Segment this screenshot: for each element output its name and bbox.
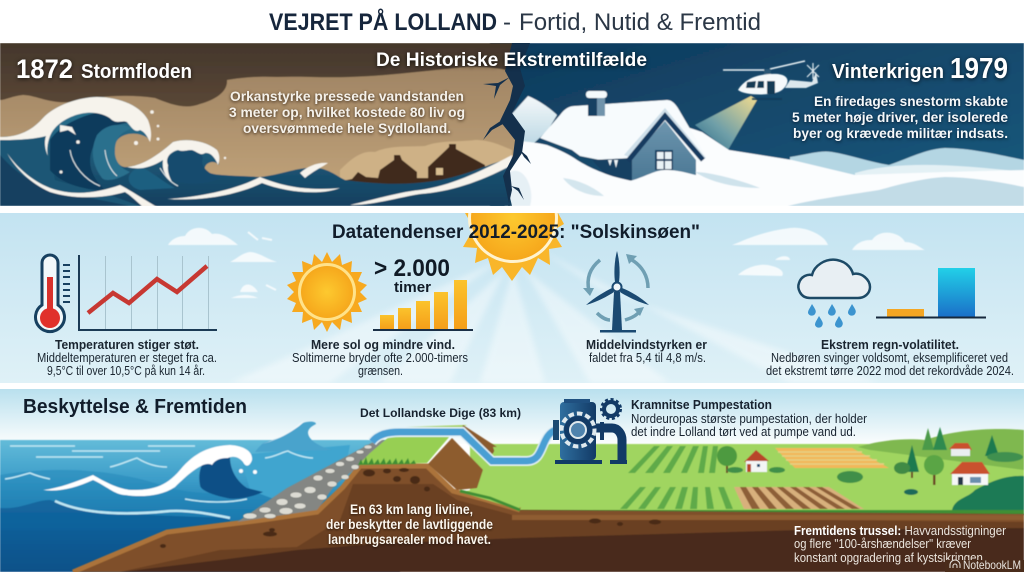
back snow drift: [600, 128, 1024, 206]
text: wind caption: Middelvindstyrken er: [586, 337, 707, 352]
front dike top: [358, 436, 450, 465]
text: winter war description: En firedages snestorm skabte: [814, 93, 1008, 109]
scene: dike cross-section: [73, 425, 1024, 572]
icon: helicopter spotlight: [695, 96, 757, 150]
text: storm flood description: oversvømmede hele Sydlolland.: [243, 120, 451, 136]
title: [269, 8, 761, 36]
item: sun hours: [287, 252, 473, 378]
title: VEJRET PÅ LOLLAND: [269, 8, 497, 36]
text: sun hours caption: [292, 337, 468, 378]
clouds: [168, 228, 925, 298]
heading: storm flood: 1872: [16, 54, 73, 84]
label: dike: Det Lollandske Dige (83 km): [360, 406, 521, 420]
text: future threat: konstant opgradering af kystsikringen.: [794, 551, 986, 565]
icon: trees and bushes: [717, 427, 1024, 510]
icon: pump station: [553, 399, 627, 464]
text: pump station: [631, 397, 867, 439]
text: temperature caption: 9,5°C til over 10,5°C på kun 14 år.: [47, 364, 205, 378]
text: wind caption: [586, 337, 707, 365]
heading: storm flood: [16, 58, 193, 82]
heading: protection: Beskyttelse & Fremtiden: [23, 396, 247, 418]
icon: farmhouses: [727, 443, 990, 485]
panel: data trends: [0, 213, 1024, 383]
text: wind caption: faldet fra 5,4 til 4,8 m/s.: [589, 351, 706, 365]
heading: winter war: [832, 53, 1008, 85]
icon: crop stripes: [620, 446, 733, 509]
text: pump station: Nordeuropas største pumpestation, der holder: [631, 412, 867, 426]
chart: rain bars: [876, 268, 986, 318]
text: temperature caption: Temperaturen stiger støt.: [55, 337, 199, 352]
sun rays: [242, 266, 864, 382]
heading: data trends: Datatendenser 2012-2025: "Solskinsøen": [332, 221, 700, 243]
icon: breaking wave: [43, 445, 252, 496]
icon: water channel: [372, 430, 556, 461]
icon: ploughed field: [734, 487, 864, 509]
heading: winter war: 1979: [950, 53, 1008, 85]
text: future threat: og flere "100-årshændelser" kræver: [794, 537, 971, 551]
text: storm flood description: Orkanstyrke pressede vandstanden: [230, 88, 464, 104]
stones: [237, 440, 385, 522]
text: pump station: Kramnitse Pumpestation: [631, 397, 772, 412]
second wave interior: [168, 150, 210, 174]
white crest: [0, 97, 151, 156]
icon: rain cloud: [798, 260, 870, 328]
item: rain: [766, 260, 1014, 378]
scene: storm flood 1872: [0, 43, 540, 207]
text: temperature caption: [37, 337, 217, 378]
text: rain caption: Ekstrem regn-volatilitet.: [821, 337, 959, 352]
icon: wheat field: [775, 448, 889, 468]
icon: helicopter: [723, 61, 819, 99]
icon: thermometer: [36, 255, 70, 332]
icon: crack between eras: [483, 43, 531, 208]
text: winter war description: byer og krævede militær indsats.: [793, 125, 1008, 141]
text: storm flood description: 3 meter op, hvilket kostede 80 liv og: [229, 104, 465, 120]
icon: snow-covered house: [540, 91, 706, 181]
second crest: [127, 140, 219, 182]
title: Fortid, Nutid & Fremtid: [519, 9, 761, 36]
text: future threat: [794, 524, 1006, 565]
text: sun hours caption: Mere sol og mindre vind.: [311, 337, 455, 352]
earth flecks: [160, 468, 661, 548]
text: sun hours caption: Soltimerne bryder ofte 2.000-timers: [292, 351, 468, 365]
icon: silhouetted houses: [337, 144, 485, 186]
panel: protection and future: [0, 389, 1024, 572]
text: temperature caption: Middeltemperaturen er steget fra ca.: [37, 351, 217, 365]
text: sun hours unit: timer: [394, 279, 431, 296]
text: storm flood description: [229, 88, 465, 136]
text: dike description: [326, 502, 493, 547]
item: wind: [583, 251, 707, 365]
scene: winter 1979 background: [490, 43, 1024, 206]
front snow drift: [504, 141, 696, 206]
icon: wind turbine: [583, 251, 649, 332]
item: temperature: [36, 255, 217, 378]
icon: large sun: [463, 213, 564, 281]
text: dike description: landbrugsarealer mod havet.: [328, 532, 491, 547]
scene: sea: [0, 421, 400, 572]
icon: sun: [287, 252, 367, 332]
foam lines: [7, 153, 157, 207]
text: winter war description: 5 meter høje driver, der isolerede: [792, 109, 1008, 125]
spray: [134, 141, 138, 145]
earth layers: [73, 466, 1024, 572]
text: sun hours caption: grænsen.: [358, 364, 403, 378]
heading: storm flood: Stormfloden: [81, 61, 192, 83]
chart: sun hours bars: [373, 280, 473, 331]
text: pump station: det indre Lolland tørt ved at pumpe vand ud.: [631, 425, 856, 439]
text: future threat: Fremtidens trussel: Havvandsstigninger: [794, 524, 1006, 538]
back dike block: [395, 425, 467, 432]
panel: historical extremes: [0, 43, 1024, 208]
heading: winter war: Vinterkrigen: [832, 61, 944, 83]
sea base: [0, 97, 540, 206]
dark curl interior: [50, 112, 127, 190]
text: winter war description: [792, 93, 1008, 141]
scene: farmland: [400, 427, 1024, 515]
text: dike description: der beskytter de lavtliggende: [326, 517, 493, 532]
text: sun hours value: > 2.000: [374, 255, 450, 282]
title: -: [503, 9, 511, 36]
icon: storm wave: [0, 97, 540, 207]
text: dike description: En 63 km lang livline,: [350, 502, 473, 517]
heading: historical extremes: De Historiske Ekstremtilfælde: [376, 50, 647, 71]
text: rain caption: [766, 337, 1014, 378]
chart: temperature line: [79, 255, 217, 330]
